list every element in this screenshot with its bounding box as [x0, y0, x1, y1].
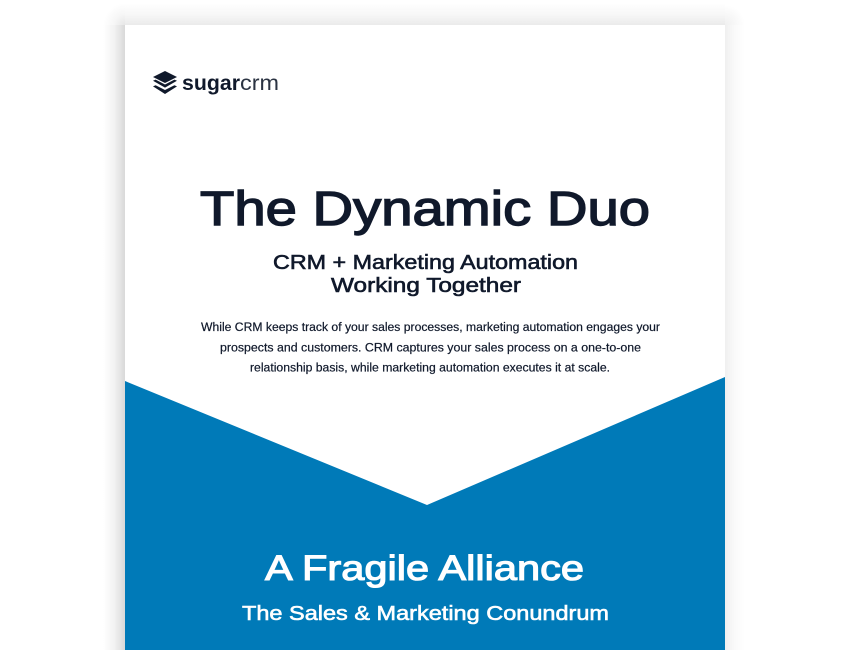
wordmark: sugarcrm: [182, 72, 279, 95]
panel: blue chevron section: [125, 377, 725, 650]
intro text: [201, 322, 660, 374]
card shadow: [103, 3, 745, 650]
intro text: relationship basis, while marketing automation executes it at scale.: [250, 362, 610, 374]
title: The Dynamic Duo: [200, 183, 650, 236]
white card panel: [125, 25, 725, 650]
logo: sugarcrm: [153, 71, 279, 95]
subtitle: CRM + Marketing Automation: [273, 251, 578, 274]
section heading: A Fragile Alliance: [265, 549, 584, 588]
subtitle: Working Together: [331, 274, 521, 297]
section subheading: The Sales & Marketing Conundrum: [242, 602, 609, 625]
intro text: While CRM keeps track of your sales processes, marketing automation engages your: [201, 322, 660, 334]
intro text: prospects and customers. CRM captures your sales process on a one-to-one: [220, 342, 641, 354]
icon: stacked layers: [153, 71, 177, 94]
subtitle: [273, 251, 578, 297]
